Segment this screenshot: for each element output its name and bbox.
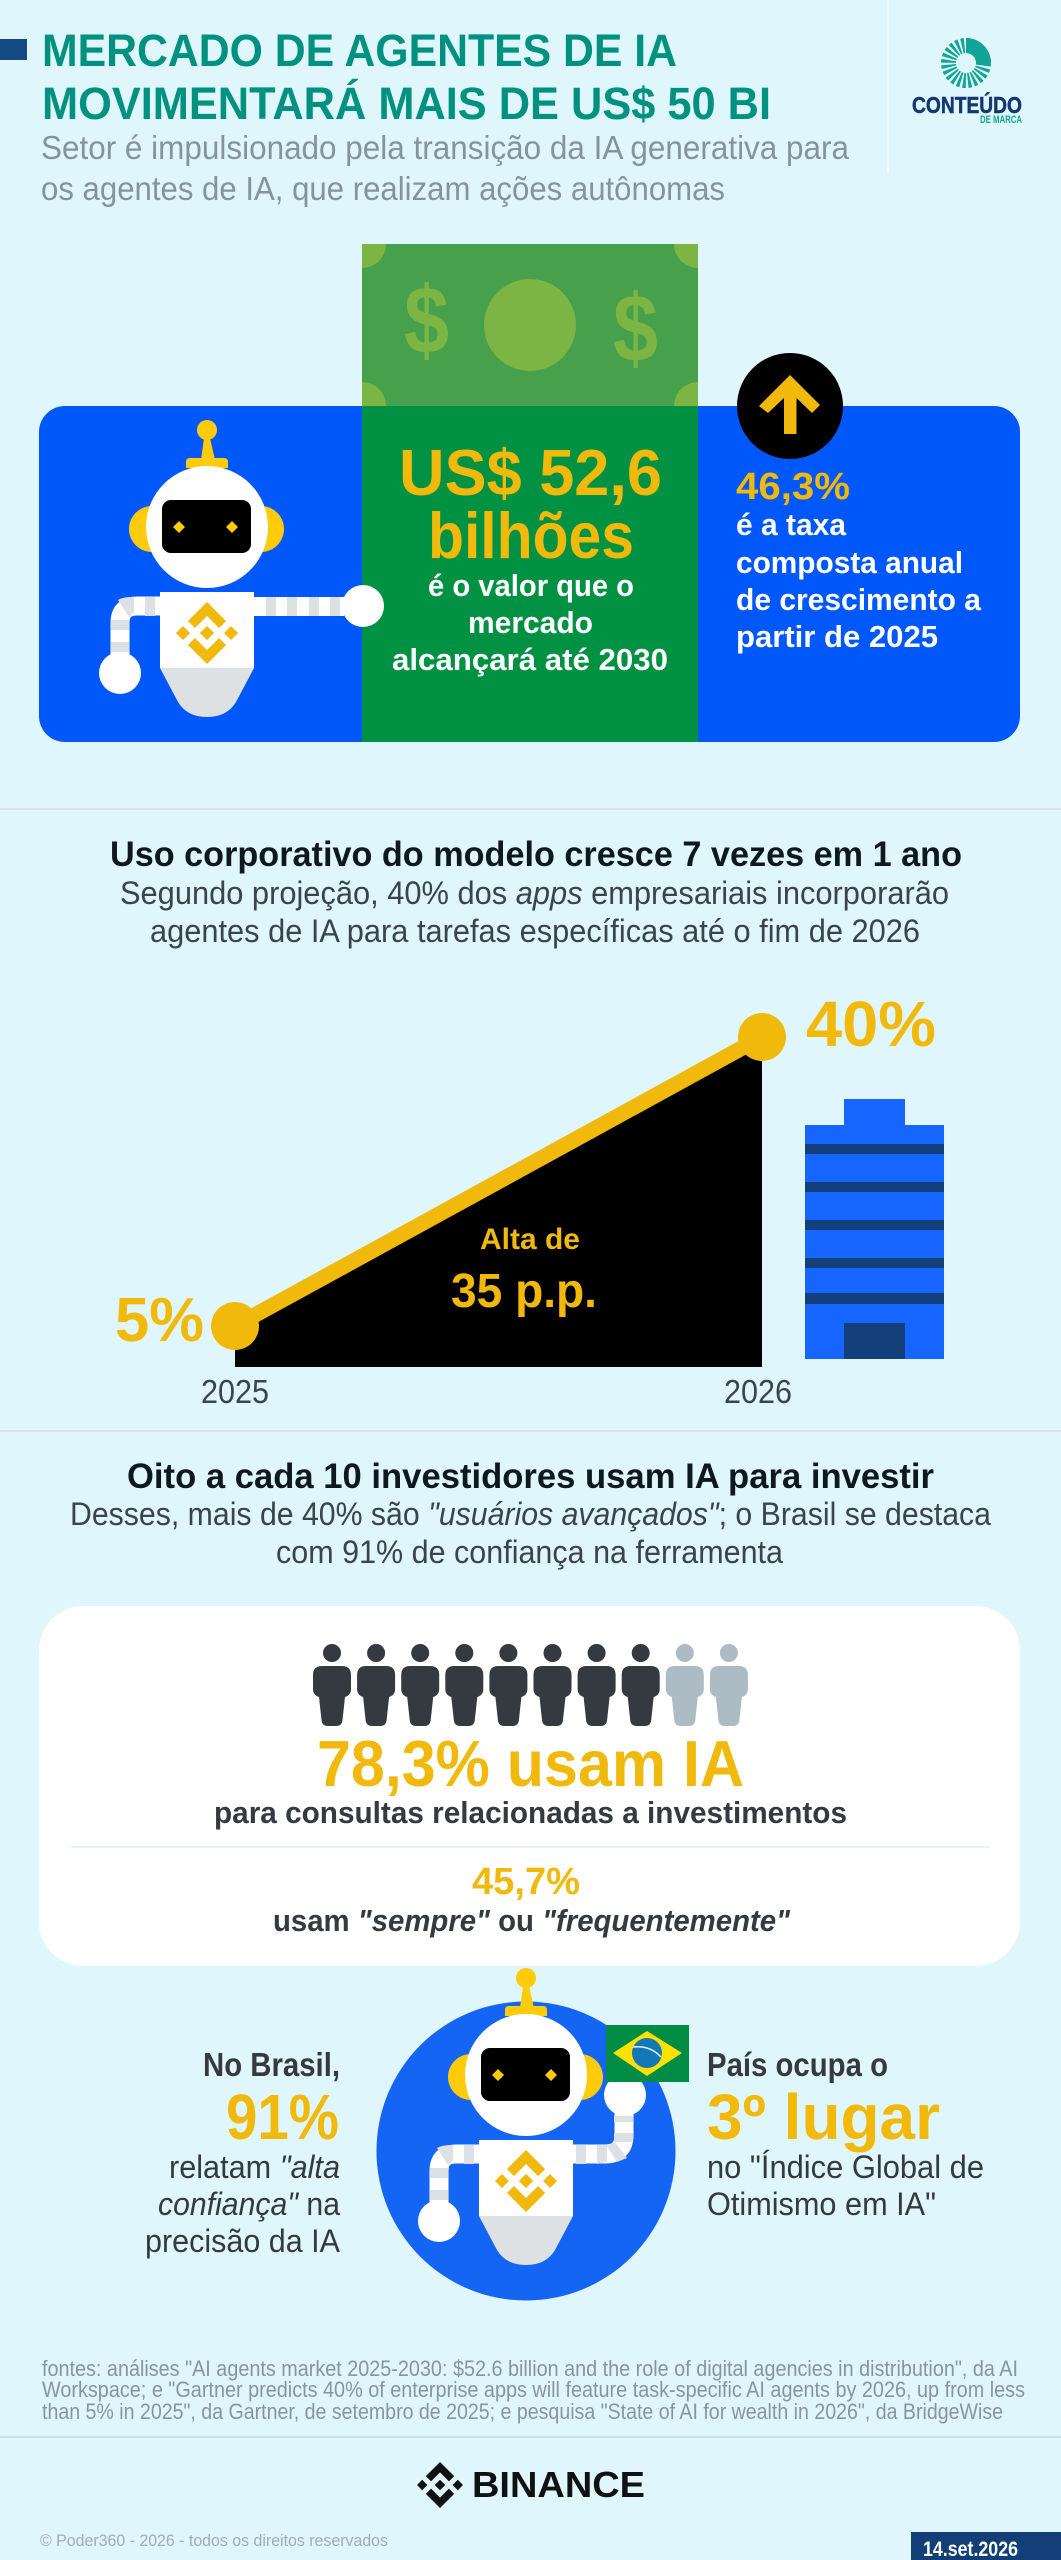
stat: 45,7%: 45,7% <box>472 1861 580 1903</box>
market value text: é o valor que o <box>428 568 634 603</box>
market value text: bilhões <box>428 499 634 572</box>
banknote <box>362 244 698 742</box>
market value text <box>392 436 668 677</box>
icon: brazil flag <box>606 2025 689 2082</box>
chart: growth from 5% to 40% <box>115 988 936 1410</box>
panel: investor stats <box>39 1606 1020 1966</box>
text: brazil ranking <box>707 2046 984 2222</box>
title: MOVIMENTARÁ MAIS DE US$ 50 BI <box>42 78 771 129</box>
section heading: investors: Desses, mais de 40% são "usuários avançados"; o Brasil se destaca <box>70 1496 991 1532</box>
section heading: investors <box>70 1457 991 1570</box>
icon: building <box>805 1099 944 1359</box>
subtitle: Setor é impulsionado pela transição da IA generativa para <box>41 129 850 166</box>
title <box>42 25 771 129</box>
logo: conteúdo de marca: CONTEÚDO <box>912 91 1022 118</box>
text: brazil ranking: Otimismo em IA" <box>707 2186 936 2222</box>
value labels: Alta de <box>480 1223 580 1256</box>
stat: 78,3%: 78,3% usam IA <box>317 1727 744 1800</box>
icon: up arrow <box>737 353 843 459</box>
text: brazil confidence: precisão da IA <box>145 2223 341 2259</box>
text: brazil confidence: confiança" na <box>158 2186 340 2222</box>
market value text: alcançará até 2030 <box>392 642 668 677</box>
value labels: 35 p.p. <box>451 1265 597 1318</box>
logo: binance: BINANCE <box>472 2464 645 2505</box>
stat: 45,7% <box>273 1861 791 1938</box>
title: MERCADO DE AGENTES DE IA <box>42 25 677 76</box>
stat: 45,7%: usam "sempre" ou "frequentemente" <box>273 1903 791 1938</box>
text: brazil ranking: País ocupa o <box>707 2046 888 2083</box>
trend line <box>211 1013 786 1350</box>
year labels <box>201 1373 792 1410</box>
copyright: © Poder360 - 2026 - todos os direitos reservados <box>40 2531 388 2550</box>
text: brazil confidence: relatam "alta <box>169 2149 340 2185</box>
growth rate text: de crescimento a <box>736 582 982 617</box>
text: brazil ranking: 3º lugar <box>707 2081 940 2153</box>
icon: robot with flag <box>418 1968 689 2265</box>
section heading: investors: Oito a cada 10 investidores usam IA para investir <box>127 1457 934 1496</box>
text: brazil ranking: no "Índice Global de <box>707 2149 984 2185</box>
subtitle: os agentes de IA, que realizam ações autônomas <box>41 170 725 207</box>
panel: market value <box>39 220 1020 742</box>
area <box>235 1037 762 1367</box>
section heading: corporate use: Uso corporativo do modelo cresce 7 vezes em 1 ano <box>110 835 962 874</box>
header <box>0 25 850 207</box>
stat: 78,3% <box>214 1727 847 1830</box>
logo: conteúdo de marca <box>912 38 1022 126</box>
icon: robot <box>99 420 384 717</box>
blue panel background <box>39 406 1020 742</box>
section heading: corporate use: Segundo projeção, 40% dos apps empresariais incorporarão <box>120 875 949 911</box>
value labels: 40% <box>806 988 936 1060</box>
growth rate text: partir de 2025 <box>736 619 938 654</box>
blue circle behind robot <box>376 2002 676 2300</box>
text: brazil confidence: No Brasil, <box>203 2046 340 2083</box>
banknote: $ <box>404 267 449 374</box>
banknote: $ <box>613 275 658 382</box>
growth rate text: é a taxa <box>736 507 847 542</box>
icon: people row <box>313 1644 748 1726</box>
subtitle <box>41 129 850 207</box>
growth rate text <box>736 466 982 654</box>
year labels: 2026 <box>724 1373 792 1410</box>
value labels <box>115 988 936 1355</box>
accent square <box>0 39 27 60</box>
text: brazil confidence <box>145 2046 341 2259</box>
growth rate text: 46,3% <box>736 466 850 508</box>
section heading: investors: com 91% de confiança na ferramenta <box>276 1534 783 1570</box>
logo: conteúdo de marca: DE MARCA <box>980 114 1022 126</box>
date tag <box>911 2532 1061 2560</box>
year labels: 2025 <box>201 1373 269 1410</box>
text: brazil confidence: 91% <box>226 2081 339 2153</box>
market value text: US$ 52,6 <box>399 436 662 509</box>
stat: 78,3%: para consultas relacionadas a investimentos <box>214 1795 847 1830</box>
section heading: corporate use: agentes de IA para tarefas específicas até o fim de 2026 <box>150 913 920 949</box>
growth rate text: composta anual <box>736 545 963 580</box>
logo: binance <box>417 2462 645 2508</box>
value labels: 5% <box>115 1286 204 1355</box>
market value text: mercado <box>468 605 593 640</box>
sources <box>42 2356 1025 2424</box>
section heading: corporate use <box>110 835 962 949</box>
